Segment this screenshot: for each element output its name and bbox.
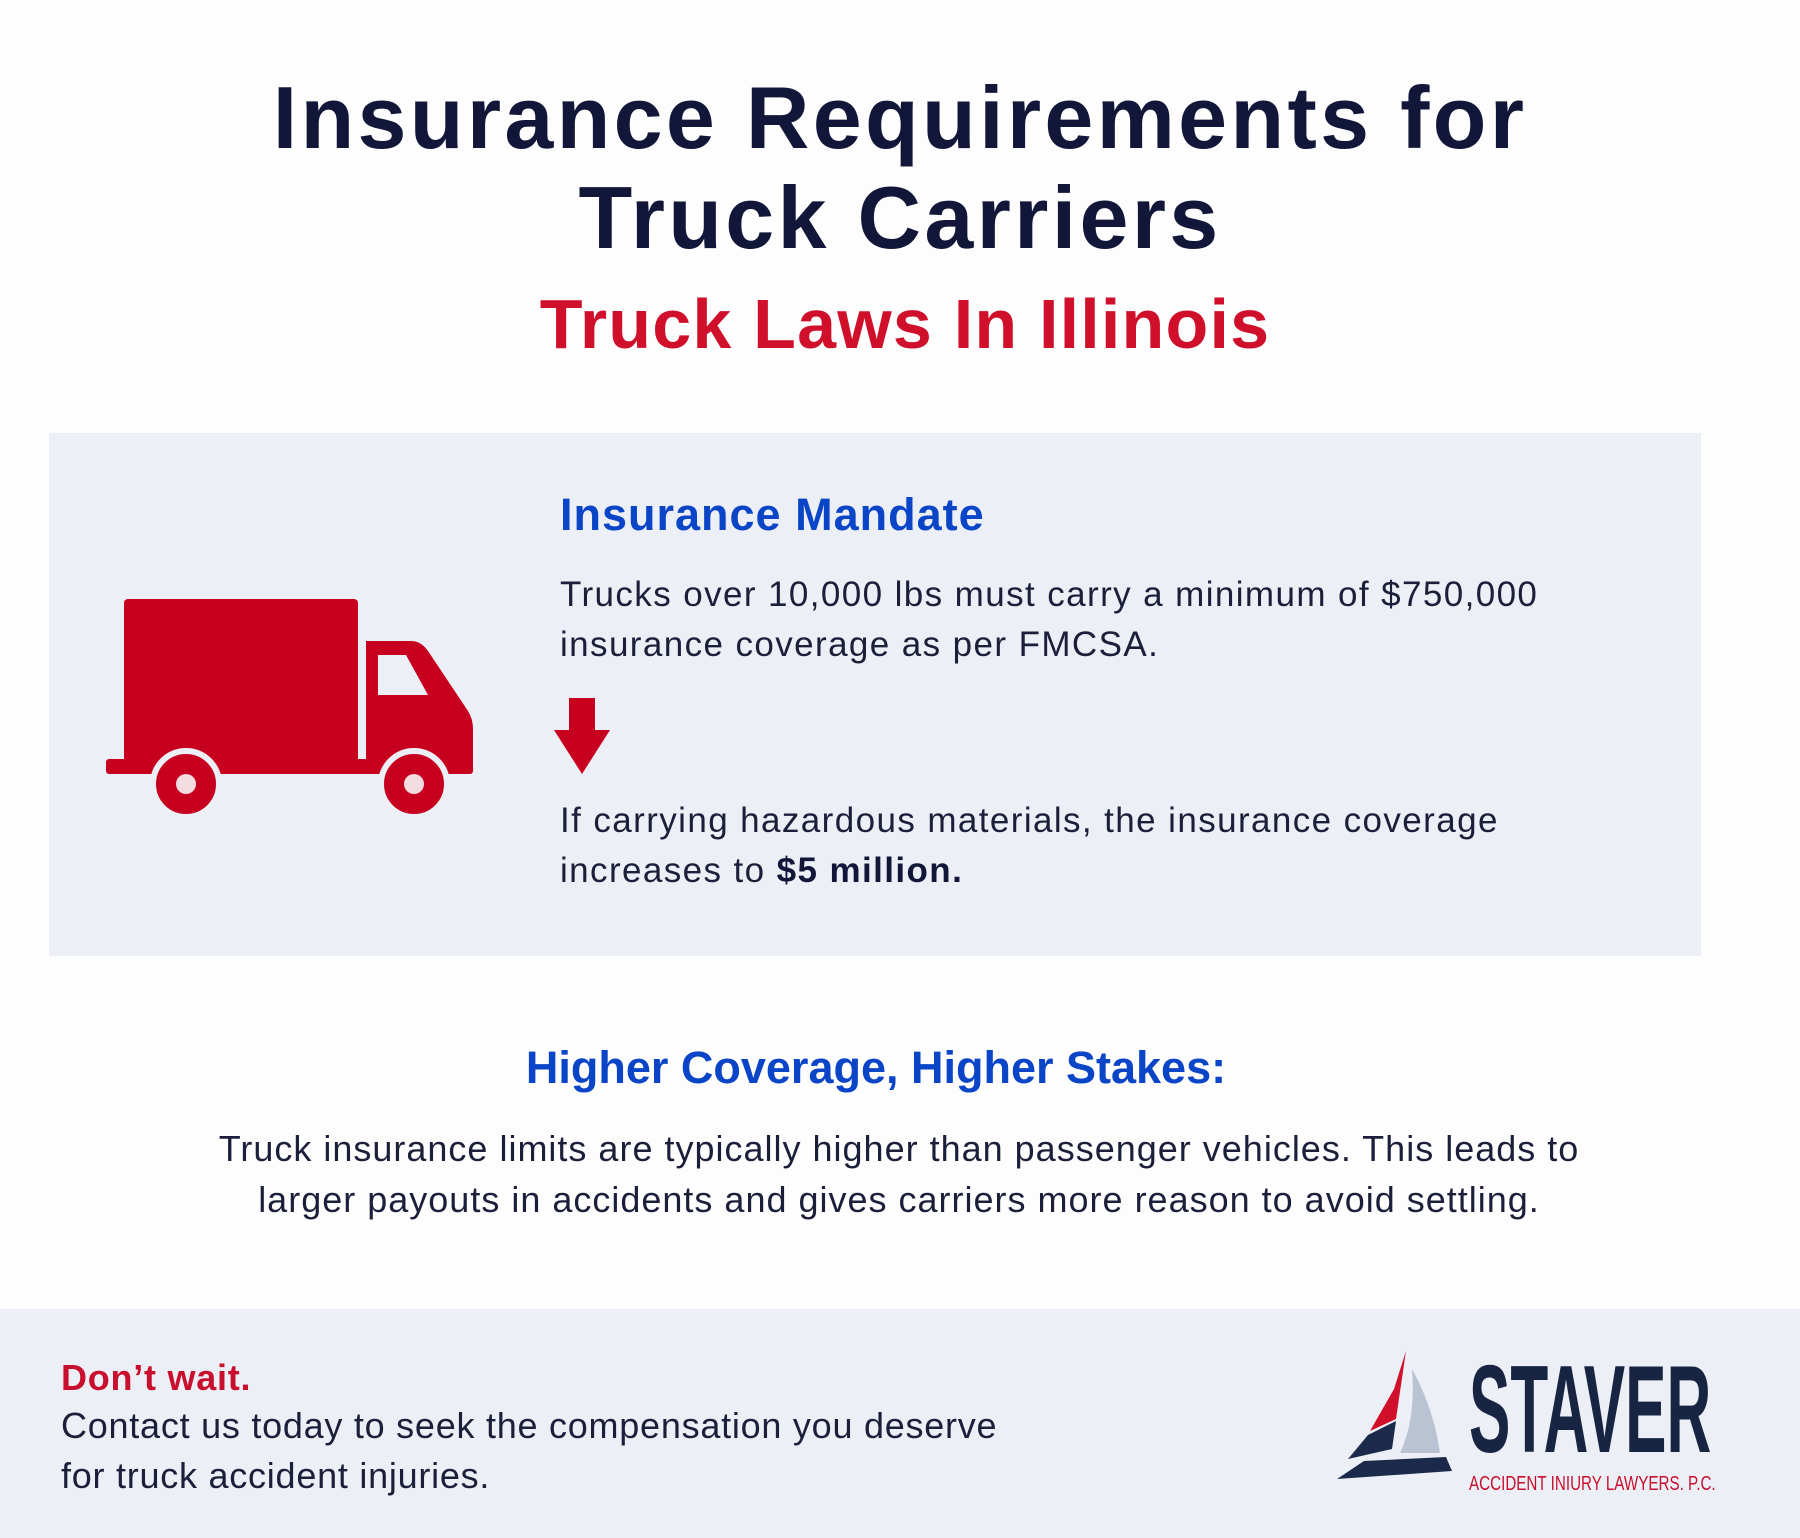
text: hazardous materials: [560, 801, 1499, 890]
icon: red truck: [106, 599, 473, 814]
text: higher stakes paragraph: Truck insurance limits are typically higher than passenger vehicles. This leads to: [219, 1128, 1579, 1169]
footer band: [0, 1309, 1800, 1538]
text: hazardous materials: If carrying hazardous materials, the insurance coverage: [560, 801, 1499, 840]
title: Truck Carriers: [578, 168, 1222, 267]
callout: don't wait: [61, 1357, 997, 1496]
subtitle: Truck Laws In Illinois: [540, 285, 1270, 363]
callout: don't wait: for truck accident injuries.: [61, 1455, 490, 1496]
text: minimum coverage: Trucks over 10,000 lbs must carry a minimum of $750,000: [560, 575, 1538, 614]
text: minimum coverage: insurance coverage as per FMCSA.: [560, 625, 1159, 664]
title: Insurance Requirements for: [273, 68, 1527, 167]
logo: staver: [1337, 1341, 1716, 1495]
text: higher stakes paragraph: [219, 1128, 1579, 1220]
text: minimum coverage: [560, 575, 1538, 664]
text: logo tagline: ACCIDENT INIURY LAWYERS. P.C.: [1469, 1473, 1716, 1495]
callout: don't wait: Don’t wait.: [61, 1357, 251, 1398]
arrow: down: [554, 698, 610, 774]
title: [273, 68, 1527, 267]
text: higher stakes paragraph: larger payouts in accidents and gives carriers more reason to avoid settling.: [258, 1179, 1540, 1220]
text: STAVER: STAVER: [1469, 1341, 1711, 1479]
callout: don't wait: Contact us today to seek the compensation you deserve: [61, 1405, 997, 1446]
panel: insurance mandate: [49, 433, 1701, 956]
heading: insurance mandate: Insurance Mandate: [560, 489, 985, 540]
heading: higher coverage: Higher Coverage, Higher Stakes:: [526, 1042, 1226, 1093]
icon: sailboat: [1337, 1351, 1452, 1479]
text: hazardous materials: increases to $5 million.: [560, 851, 963, 890]
